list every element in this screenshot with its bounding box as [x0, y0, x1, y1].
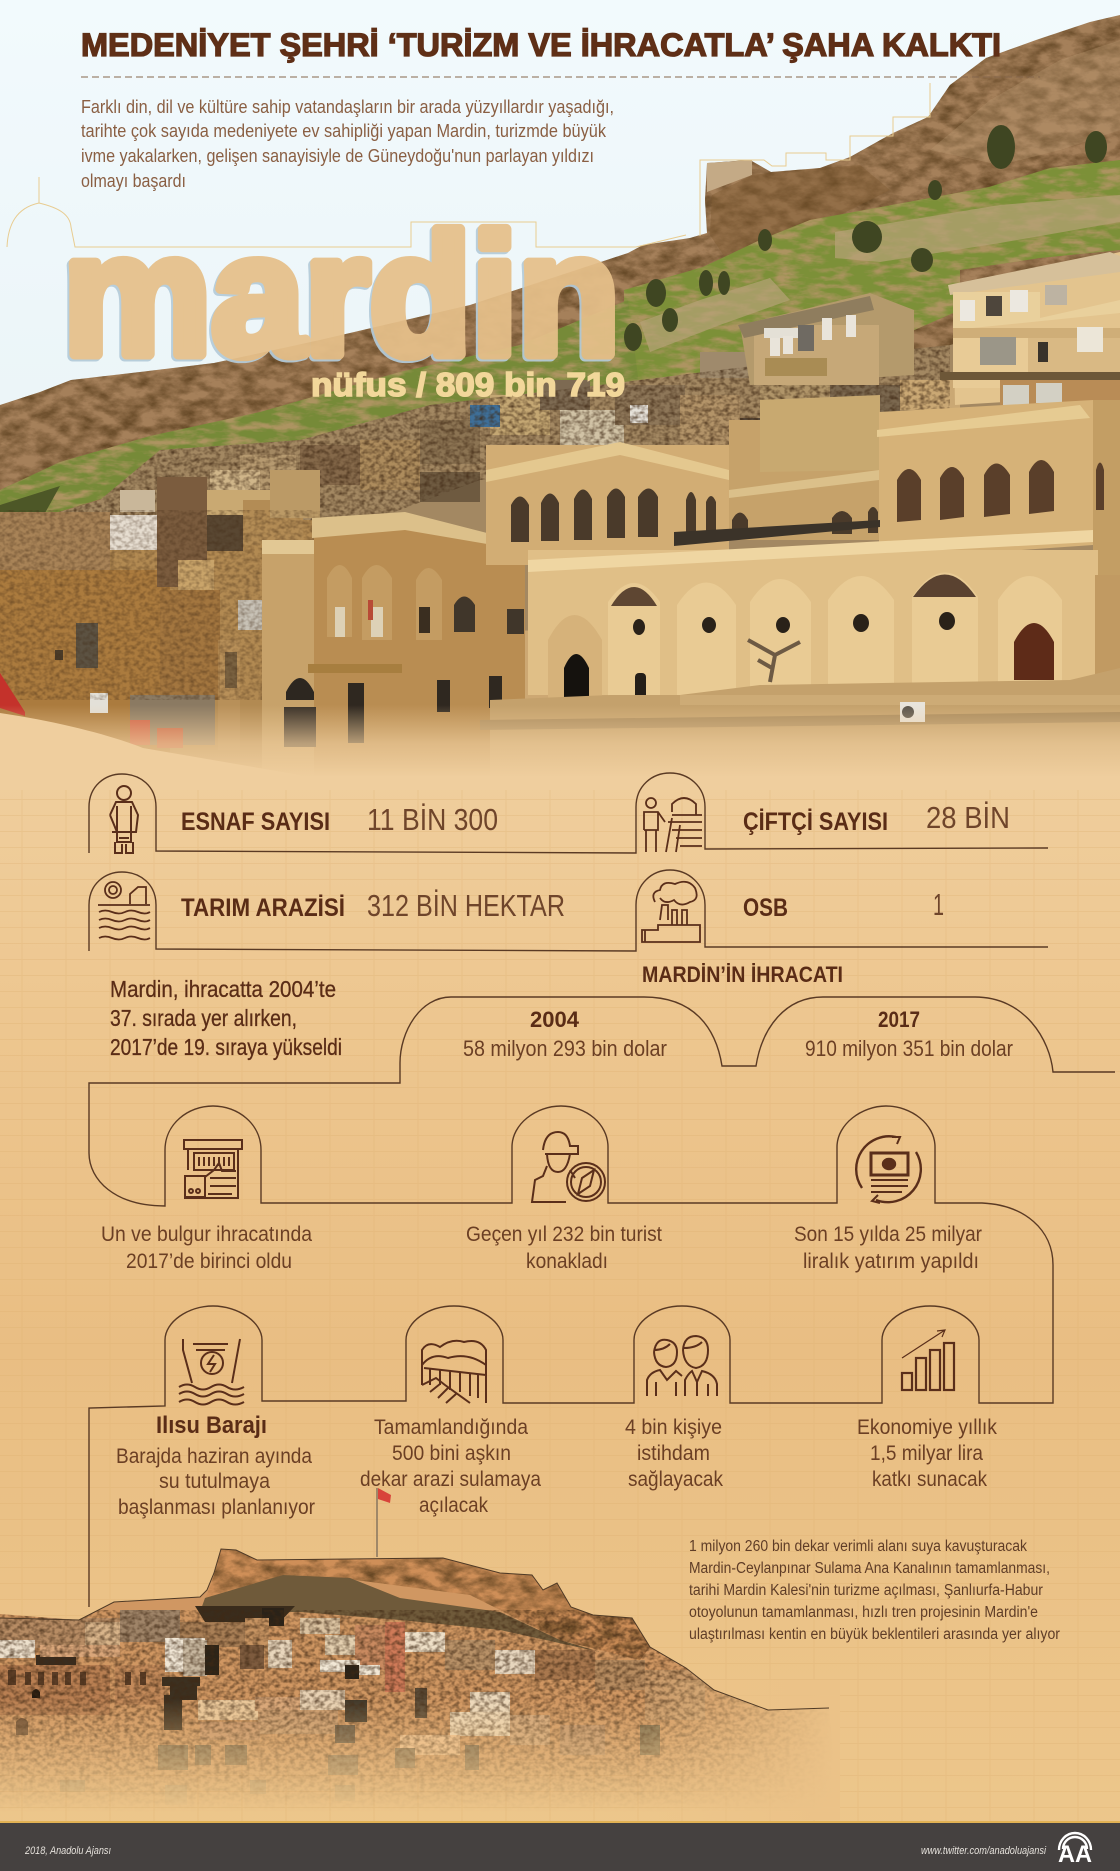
trees	[624, 125, 1107, 351]
label: tarim arazisi: TARIM ARAZİSİ	[181, 894, 345, 922]
export rank text: 2017’de 19. sıraya yükseldi	[110, 1034, 342, 1060]
balcony railing	[674, 520, 880, 546]
expectations paragraph: tarihi Mardin Kalesi'nin turizme açılması, Şanlıurfa-Habur	[689, 1582, 1043, 1599]
caption: ilisu dam	[116, 1412, 315, 1519]
icon: shopkeeper with apron	[110, 786, 138, 853]
intro paragraph: ivme yakalarken, gelişen sanayisiyle de Güneydoğu'nun parlayan yıldızı	[81, 146, 594, 166]
export rank text	[110, 976, 342, 1060]
twitter url: www.twitter.com/anadoluajansi	[921, 1845, 1046, 1857]
icon: dam in landscape	[422, 1341, 486, 1403]
expectations paragraph: 1 milyon 260 bin dekar verimli alanı suya kavuşturacak	[689, 1538, 1027, 1555]
expectations paragraph: otoyolunun tamamlanması, hızlı tren projesinin Mardin'e	[689, 1604, 1038, 1621]
intro paragraph: olmayı başardı	[81, 171, 186, 191]
upper stone house	[738, 293, 914, 385]
intro paragraph: Farklı din, dil ve kültüre sahip vatandaşların bir arada yüzyıllardır yaşadığı,	[81, 97, 614, 117]
value: 312 bin hektar: 312 BİN HEKTAR	[367, 888, 565, 923]
caption: economy	[857, 1415, 997, 1491]
right fade of town	[640, 1680, 840, 1820]
caption: irrigation: 500 bini aşkın	[392, 1441, 511, 1465]
caption: irrigation: açılacak	[419, 1493, 488, 1517]
outline of town silhouette	[0, 1549, 829, 1710]
caption: economy: 1,5 milyar lira	[870, 1441, 983, 1465]
middle stone building	[262, 512, 525, 785]
export heading: MARDİN’İN İHRACATI	[642, 962, 843, 987]
caption body: su tutulmaya	[159, 1469, 270, 1493]
icon: factory with smoke	[642, 882, 700, 942]
green slope lower left	[0, 300, 640, 530]
caption: employment: sağlayacak	[628, 1467, 723, 1491]
stone terrace	[490, 668, 1120, 785]
stat: tarim arazisi and osb row with arches	[89, 870, 1048, 951]
value: 1: 1	[933, 887, 944, 922]
hill with rock faces	[0, 15, 1120, 560]
flag and pole	[377, 1488, 391, 1557]
intro paragraph	[81, 97, 614, 191]
upper houses	[0, 1610, 645, 1718]
caption body	[116, 1444, 315, 1519]
small tree	[748, 640, 800, 682]
copyright: 2018, Anadolu Ajansı	[24, 1845, 111, 1857]
population: nüfus / 809 bin 719	[311, 366, 625, 403]
caption: irrigation: Tamamlandığında	[374, 1415, 528, 1439]
intro paragraph: tarihte çok sayıda medeniyete ev sahipliği yapan Mardin, turizmde büyük	[81, 121, 607, 141]
main stone mansion	[480, 395, 1120, 785]
upper floor arched windows	[511, 488, 878, 542]
caption: tourists: Geçen yıl 232 bin turist	[466, 1222, 662, 1246]
export 2004: 2004	[530, 1007, 580, 1032]
caption body: başlanması planlanıyor	[118, 1495, 315, 1519]
caption: irrigation: dekar arazi sulamaya	[360, 1467, 541, 1491]
city name: mardin: mardin	[63, 199, 620, 391]
town image	[0, 1550, 819, 1804]
small red flag	[0, 673, 25, 716]
caption: flour and bulgur export	[101, 1222, 312, 1273]
icon: money rotating investment	[856, 1136, 921, 1203]
footer bar	[0, 1821, 1120, 1871]
export 2017	[805, 1007, 1013, 1061]
faint brick pattern	[0, 790, 1120, 1822]
icon: dam and electricity	[179, 1339, 244, 1404]
icon: farmer and barn	[644, 798, 702, 852]
export rank text: 37. sırada yer alırken,	[110, 1005, 297, 1031]
caption: irrigation	[360, 1415, 541, 1517]
label: esnaf sayisi: ESNAF SAYISI	[181, 808, 330, 836]
caption: economy: Ekonomiye yıllık	[857, 1415, 997, 1439]
caption: economy: katkı sunacak	[872, 1467, 987, 1491]
export 2017: 910 milyon 351 bin dolar	[805, 1036, 1013, 1061]
green terraces on the right slope	[624, 160, 1120, 392]
caption: investment: liralık yatırım yapıldı	[803, 1249, 979, 1273]
caption: investment	[794, 1222, 982, 1273]
export rank text: Mardin, ihracatta 2004’te	[110, 976, 336, 1002]
value: 11 bin 300: 11 BİN 300	[367, 802, 498, 837]
label: osb: OSB	[743, 894, 788, 922]
expectations paragraph: Mardin-Ceylanpınar Sulama Ana Kanalının tamamlanması,	[689, 1560, 1050, 1577]
expectations paragraph	[689, 1538, 1060, 1643]
logo: AA: AA	[1058, 1841, 1092, 1868]
icon: rising bar chart	[902, 1330, 954, 1390]
caption: flour and bulgur export: 2017’de birinci oldu	[126, 1249, 292, 1273]
hero photograph: Mardin old town	[0, 0, 1120, 790]
caption heading: Ilısu Barajı	[156, 1412, 267, 1439]
doors	[1014, 623, 1054, 680]
round windows	[633, 612, 955, 635]
icon: two employees	[647, 1336, 717, 1396]
icon: farmland with waves	[98, 882, 150, 940]
lower arcades and dark gaps	[0, 1665, 660, 1805]
caption: employment: istihdam	[637, 1441, 710, 1465]
caption: flour and bulgur export: Un ve bulgur ihracatında	[101, 1222, 312, 1246]
golden skyline outline	[7, 83, 930, 247]
mottled small-detail texture	[0, 1610, 814, 1802]
expectations paragraph: ulaştırılması kentin en büyük beklentileri arasında yer alıyor	[689, 1626, 1060, 1643]
icon: tourist and compass	[532, 1132, 605, 1202]
label: ciftci sayisi: ÇİFTÇİ SAYISI	[743, 808, 888, 836]
caption body: Barajda haziran ayında	[116, 1444, 312, 1468]
caption: employment	[625, 1415, 723, 1491]
mid-town houses	[0, 252, 1120, 640]
stat: esnaf sayisi and ciftci sayisi row with arches	[89, 773, 1048, 853]
winding arch line connecting sections	[89, 997, 1115, 1607]
caption: employment: 4 bin kişiye	[625, 1415, 722, 1439]
export 2004: 58 milyon 293 bin dolar	[463, 1036, 667, 1061]
large ground floor arches	[608, 572, 1062, 700]
fade of photo into sand background	[0, 705, 1120, 790]
dashed title rule	[81, 76, 1040, 78]
bottom illustration: Mardin castle and town	[0, 1488, 860, 1820]
export 2004	[463, 1007, 667, 1061]
upper right cream house	[940, 252, 1120, 405]
icon: export box and thumbs up	[184, 1140, 242, 1198]
title: MEDENİYET ŞEHRİ ‘TURİZM VE İHRACATLA’ ŞAHA KALKTI	[81, 27, 1001, 63]
export 2017: 2017	[878, 1007, 920, 1032]
caption: investment: Son 15 yılda 25 milyar	[794, 1222, 982, 1246]
caption: tourists: konakladı	[526, 1249, 608, 1273]
base sand under buildings	[0, 600, 1120, 785]
value: 28 bin: 28 BİN	[926, 800, 1010, 835]
left side of the town	[0, 470, 320, 785]
pale rock terraces	[835, 195, 1120, 262]
castle rock	[205, 1549, 650, 1660]
caption: tourists	[466, 1222, 662, 1273]
